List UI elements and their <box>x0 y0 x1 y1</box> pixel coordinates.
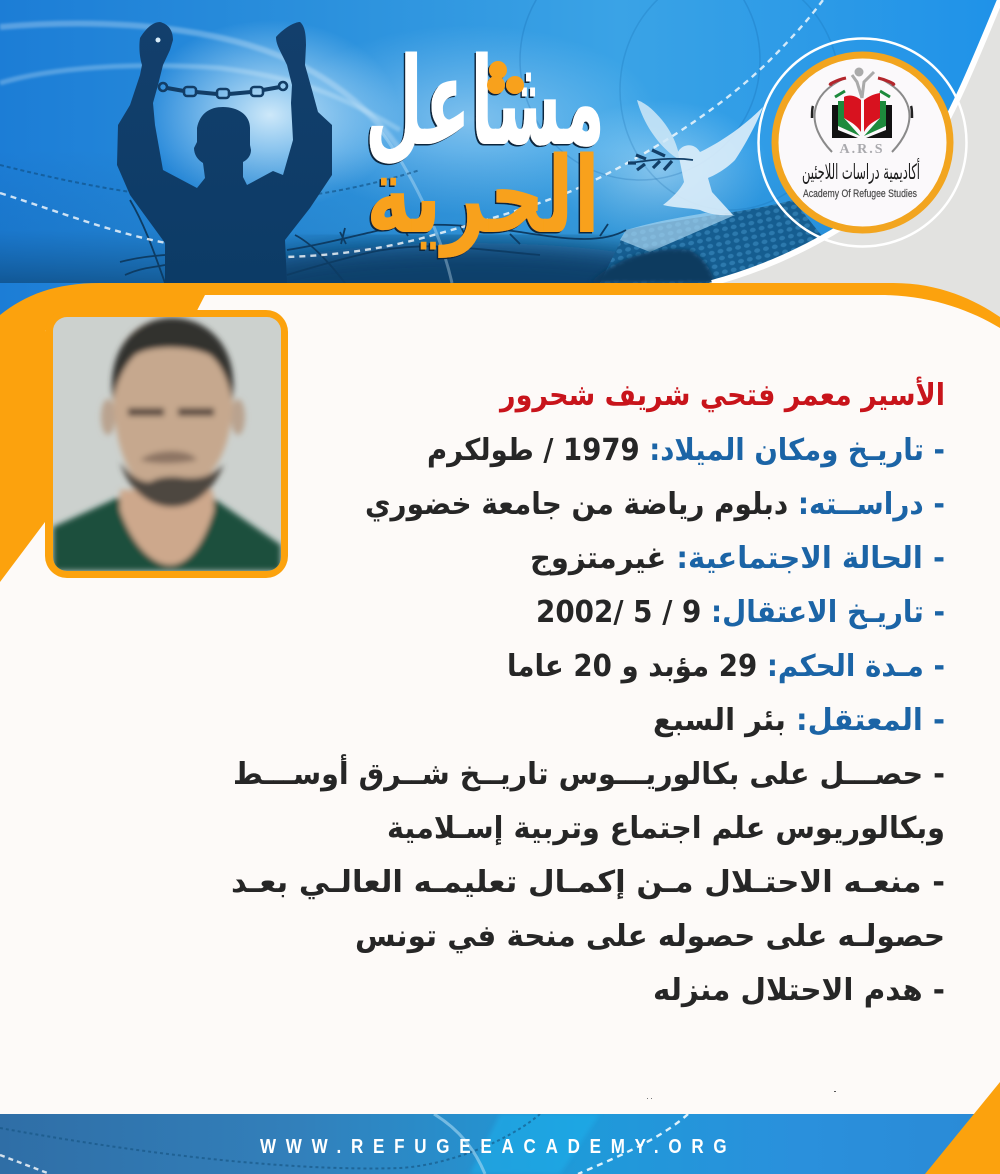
icon: barbed wire <box>120 200 626 283</box>
footer orange corner <box>925 1082 1000 1174</box>
footer website url: WWW.REFUGEEACADEMY.ORG <box>260 1135 727 1157</box>
logo initials: A.R.S <box>839 142 885 157</box>
title word: white <box>368 52 600 166</box>
arrest date row: - تاريـخ الاعتقال: 9 / 5 /2002 <box>536 595 945 630</box>
study row: - دراســته: دبلوم رياضة من جامعة خضوري <box>365 487 945 522</box>
logo badge <box>758 38 966 246</box>
photo frame <box>45 310 288 578</box>
fence and dark mound <box>596 200 822 283</box>
header banner <box>0 0 1000 330</box>
icon: prisoner silhouette with raised chained fists <box>117 22 332 283</box>
title word: white: مشاعل <box>365 31 605 173</box>
degree line 2: وبكالوريوس علم اجتماع وتربية إسـلامية <box>387 811 945 846</box>
prisoner name: الأسير معمر فتحي شريف شحرور <box>498 376 945 413</box>
icon: chain <box>159 82 287 98</box>
logo english name: Academy Of Refugee Studies <box>803 188 917 200</box>
dashed path line <box>0 0 823 257</box>
icon: dove <box>628 100 763 215</box>
title word: orange: الحرية <box>366 134 600 258</box>
header grey corner <box>650 0 1000 340</box>
logo book <box>832 93 892 138</box>
logo arcs and figure <box>812 68 912 152</box>
orange panel frame <box>0 283 1000 600</box>
birth row: - تاريـخ ومكان الميلاد: 1979 / طولكرم <box>427 433 945 468</box>
sentence row: - مـدة الحكم: 29 مؤبد و 20 عاما <box>507 649 945 684</box>
house demolished row: - هدم الاحتلال منزله <box>653 973 945 1008</box>
degree line 1: - حصـــل على بكالوريـــوس تاريــخ شــرق أوســـط <box>233 754 945 792</box>
prisoner details text <box>231 376 945 1008</box>
curve edge <box>712 0 1000 283</box>
denied education line 2: حصولـه على حصوله على منحة في تونس <box>355 919 945 954</box>
white content panel <box>0 295 1000 1114</box>
portrait photo <box>53 317 281 571</box>
denied education line 1: - منعـه الاحتـلال مـن إكمـال تعليمـه العالـي بعـد <box>231 865 945 900</box>
social status row: - الحالة الاجتماعية: غيرمتزوج <box>530 541 945 576</box>
footer band <box>0 1114 1000 1174</box>
prison row: - المعتقل: بئر السبع <box>653 703 945 738</box>
